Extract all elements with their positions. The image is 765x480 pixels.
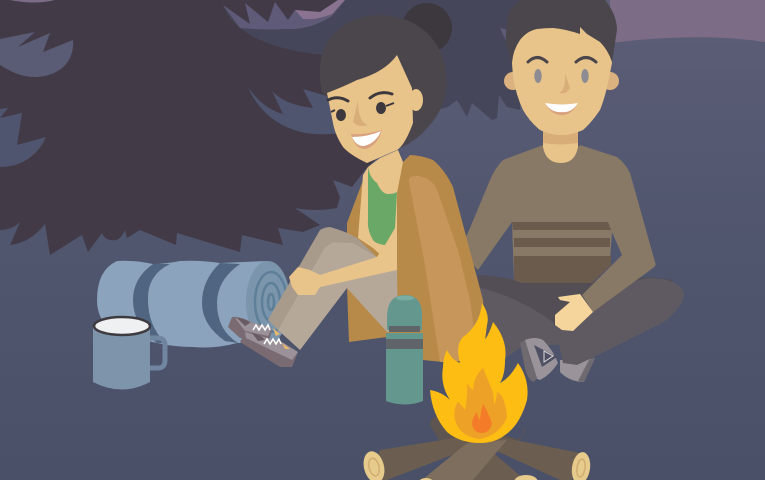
- woman: [228, 3, 487, 367]
- man nose: [559, 73, 570, 93]
- woman hand: [289, 267, 320, 295]
- woman eyes: [336, 109, 346, 121]
- man hair: [506, 0, 617, 63]
- man ears: [504, 72, 522, 90]
- woman smile: [351, 130, 382, 149]
- man stripes: [512, 222, 611, 283]
- right log: [490, 437, 580, 480]
- back tree: [225, 0, 520, 125]
- back log: [430, 416, 525, 450]
- log ends: [360, 449, 388, 480]
- thermos: [386, 295, 423, 404]
- man eyes: [534, 69, 542, 83]
- back tree window at top: [223, 0, 348, 55]
- face: [327, 55, 413, 163]
- cardigan: [347, 155, 487, 362]
- woman nose: [353, 100, 368, 126]
- man brows: [528, 58, 596, 62]
- lighter branch band: [223, 0, 345, 29]
- woman dark pants leg: [268, 227, 377, 330]
- chest and neck: [358, 150, 403, 270]
- hair: [320, 15, 446, 150]
- flame: [430, 303, 528, 443]
- tree gap lower left: [0, 113, 46, 167]
- man back shoe: [560, 358, 595, 382]
- man near leg: [476, 287, 562, 358]
- man face: [512, 20, 612, 135]
- woman arm: [320, 230, 397, 287]
- man sweater: [460, 145, 656, 312]
- tree gap right: [248, 87, 340, 134]
- woman light pants leg: [278, 242, 398, 350]
- left log: [370, 437, 470, 480]
- centre log: [422, 440, 507, 480]
- woman front shoe: [240, 328, 298, 367]
- man dark lap: [478, 275, 673, 330]
- campfire logs: [360, 416, 592, 480]
- ear: [409, 89, 423, 111]
- lower log: [450, 450, 525, 480]
- green top: [368, 167, 397, 245]
- mug: [93, 317, 165, 390]
- sleeping bag: [97, 261, 290, 348]
- woman back shoe: [228, 317, 272, 338]
- tree gap left: [0, 32, 73, 77]
- main tree: [0, 0, 380, 255]
- man smile: [545, 103, 578, 115]
- man front shoe: [520, 338, 558, 382]
- man: [460, 0, 684, 382]
- man hand: [555, 294, 593, 331]
- woman brows: [328, 93, 392, 101]
- cardigan light panel: [409, 176, 478, 362]
- man far leg: [555, 278, 684, 365]
- sky glimpse: [10, 0, 55, 2]
- man neck: [543, 130, 578, 163]
- bun: [402, 3, 452, 53]
